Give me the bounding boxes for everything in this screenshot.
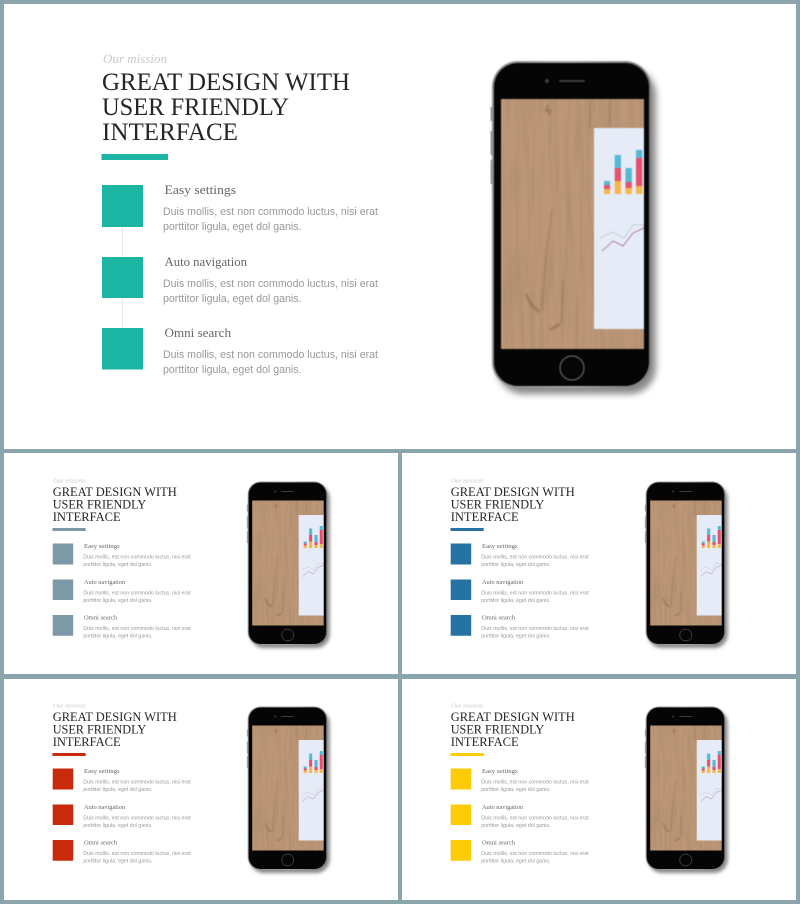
slide content: porttitor ligula, eget dol ganis. [481, 598, 551, 604]
item: omni search [102, 326, 378, 376]
slide content: INTERFACE [53, 510, 121, 524]
slide content: Easy settings [482, 543, 518, 550]
slide content: Our mission [53, 478, 85, 484]
slide content: porttitor ligula, eget dol ganis. [83, 562, 153, 568]
title: USER FRIENDLY [102, 94, 289, 121]
slide content: Our mission [451, 478, 483, 484]
slide content: GREAT DESIGN WITH [451, 485, 575, 499]
slide content: porttitor ligula, eget dol ganis. [481, 858, 551, 864]
slide content: Omni search [84, 614, 118, 622]
slide content [450, 702, 728, 873]
slide content: Our mission [53, 702, 85, 710]
list connector [122, 227, 123, 328]
slide content: INTERFACE [451, 735, 519, 749]
item: auto navigation: Auto navigation [164, 255, 248, 269]
item: auto navigation: porttitor ligula, eget dol ganis. [163, 293, 302, 305]
slide content: porttitor ligula, eget dol ganis. [83, 634, 153, 640]
panel: grey slide [4, 453, 398, 674]
slide content: Duis mollis, est non commodo luctus, nisi erat [481, 626, 589, 632]
slide content [450, 478, 728, 648]
panel: blue slide [402, 453, 796, 674]
panel: yellow slide [402, 679, 796, 900]
title [102, 69, 350, 146]
slide content: USER FRIENDLY [451, 498, 544, 512]
item: easy settings [102, 183, 378, 233]
item: easy settings: porttitor ligula, eget dol ganis. [163, 221, 302, 233]
item: omni search: Duis mollis, est non commodo luctus, nisi erat [163, 349, 378, 361]
slide content: Our mission [451, 702, 483, 710]
slide content: INTERFACE [53, 735, 121, 749]
slide content: Auto navigation [482, 804, 524, 811]
slide content: Omni search [482, 840, 516, 846]
slide content: Duis mollis, est non commodo luctus, nisi erat [481, 851, 589, 857]
slide content: porttitor ligula, eget dol ganis. [481, 787, 551, 793]
slide content: GREAT DESIGN WITH [53, 485, 177, 499]
panel: red slide [4, 679, 398, 900]
slide content: INTERFACE [451, 510, 519, 524]
item: easy settings: Easy settings [164, 183, 236, 197]
eyebrow: Our mission [103, 51, 167, 66]
title accent bar [102, 154, 168, 160]
slide content: Easy settings [84, 543, 120, 550]
slide content: porttitor ligula, eget dol ganis. [481, 634, 551, 640]
slide content: Duis mollis, est non commodo luctus, nisi erat [83, 780, 191, 786]
slide content: porttitor ligula, eget dol ganis. [83, 598, 153, 604]
slide content: porttitor ligula, eget dol ganis. [83, 787, 153, 793]
slide content: Duis mollis, est non commodo luctus, nisi erat [83, 590, 191, 596]
slide content [52, 702, 330, 873]
slide content: porttitor ligula, eget dol ganis. [83, 858, 153, 864]
item: omni search: porttitor ligula, eget dol ganis. [163, 364, 302, 376]
slide content: Omni search [84, 840, 118, 846]
slide content: Duis mollis, est non commodo luctus, nisi erat [83, 554, 191, 560]
slide content: Duis mollis, est non commodo luctus, nisi erat [481, 816, 589, 822]
item: auto navigation [102, 255, 378, 305]
phone mockup [490, 61, 656, 394]
title: GREAT DESIGN WITH [102, 69, 350, 96]
item: easy settings: Duis mollis, est non commodo luctus, nisi erat [163, 206, 378, 218]
slide content: Auto navigation [84, 804, 126, 811]
slide content: porttitor ligula, eget dol ganis. [83, 823, 153, 829]
panel: main teal slide [4, 4, 796, 449]
slide content: USER FRIENDLY [53, 498, 146, 512]
title: INTERFACE [102, 119, 238, 146]
slide content: Auto navigation [482, 579, 524, 586]
slide content: porttitor ligula, eget dol ganis. [481, 823, 551, 829]
slide content: GREAT DESIGN WITH [451, 710, 575, 724]
slide content: Duis mollis, est non commodo luctus, nisi erat [481, 554, 589, 560]
item: auto navigation: Duis mollis, est non commodo luctus, nisi erat [163, 278, 378, 290]
slide content: porttitor ligula, eget dol ganis. [481, 562, 551, 568]
slide content: GREAT DESIGN WITH [53, 710, 177, 724]
slide content: USER FRIENDLY [451, 722, 544, 736]
slide content: Duis mollis, est non commodo luctus, nisi erat [481, 590, 589, 596]
slide content: Duis mollis, est non commodo luctus, nisi erat [481, 780, 589, 786]
slide content: Duis mollis, est non commodo luctus, nisi erat [83, 816, 191, 822]
slide content [52, 478, 330, 648]
slide content: Easy settings [482, 768, 518, 775]
slide content: Auto navigation [84, 579, 126, 586]
slide content: Omni search [482, 614, 516, 622]
slide content: Easy settings [84, 768, 120, 775]
slide content: USER FRIENDLY [53, 722, 146, 736]
item: omni search: Omni search [164, 326, 232, 340]
slide content: Duis mollis, est non commodo luctus, nisi erat [83, 626, 191, 632]
slide content: Duis mollis, est non commodo luctus, nisi erat [83, 851, 191, 857]
